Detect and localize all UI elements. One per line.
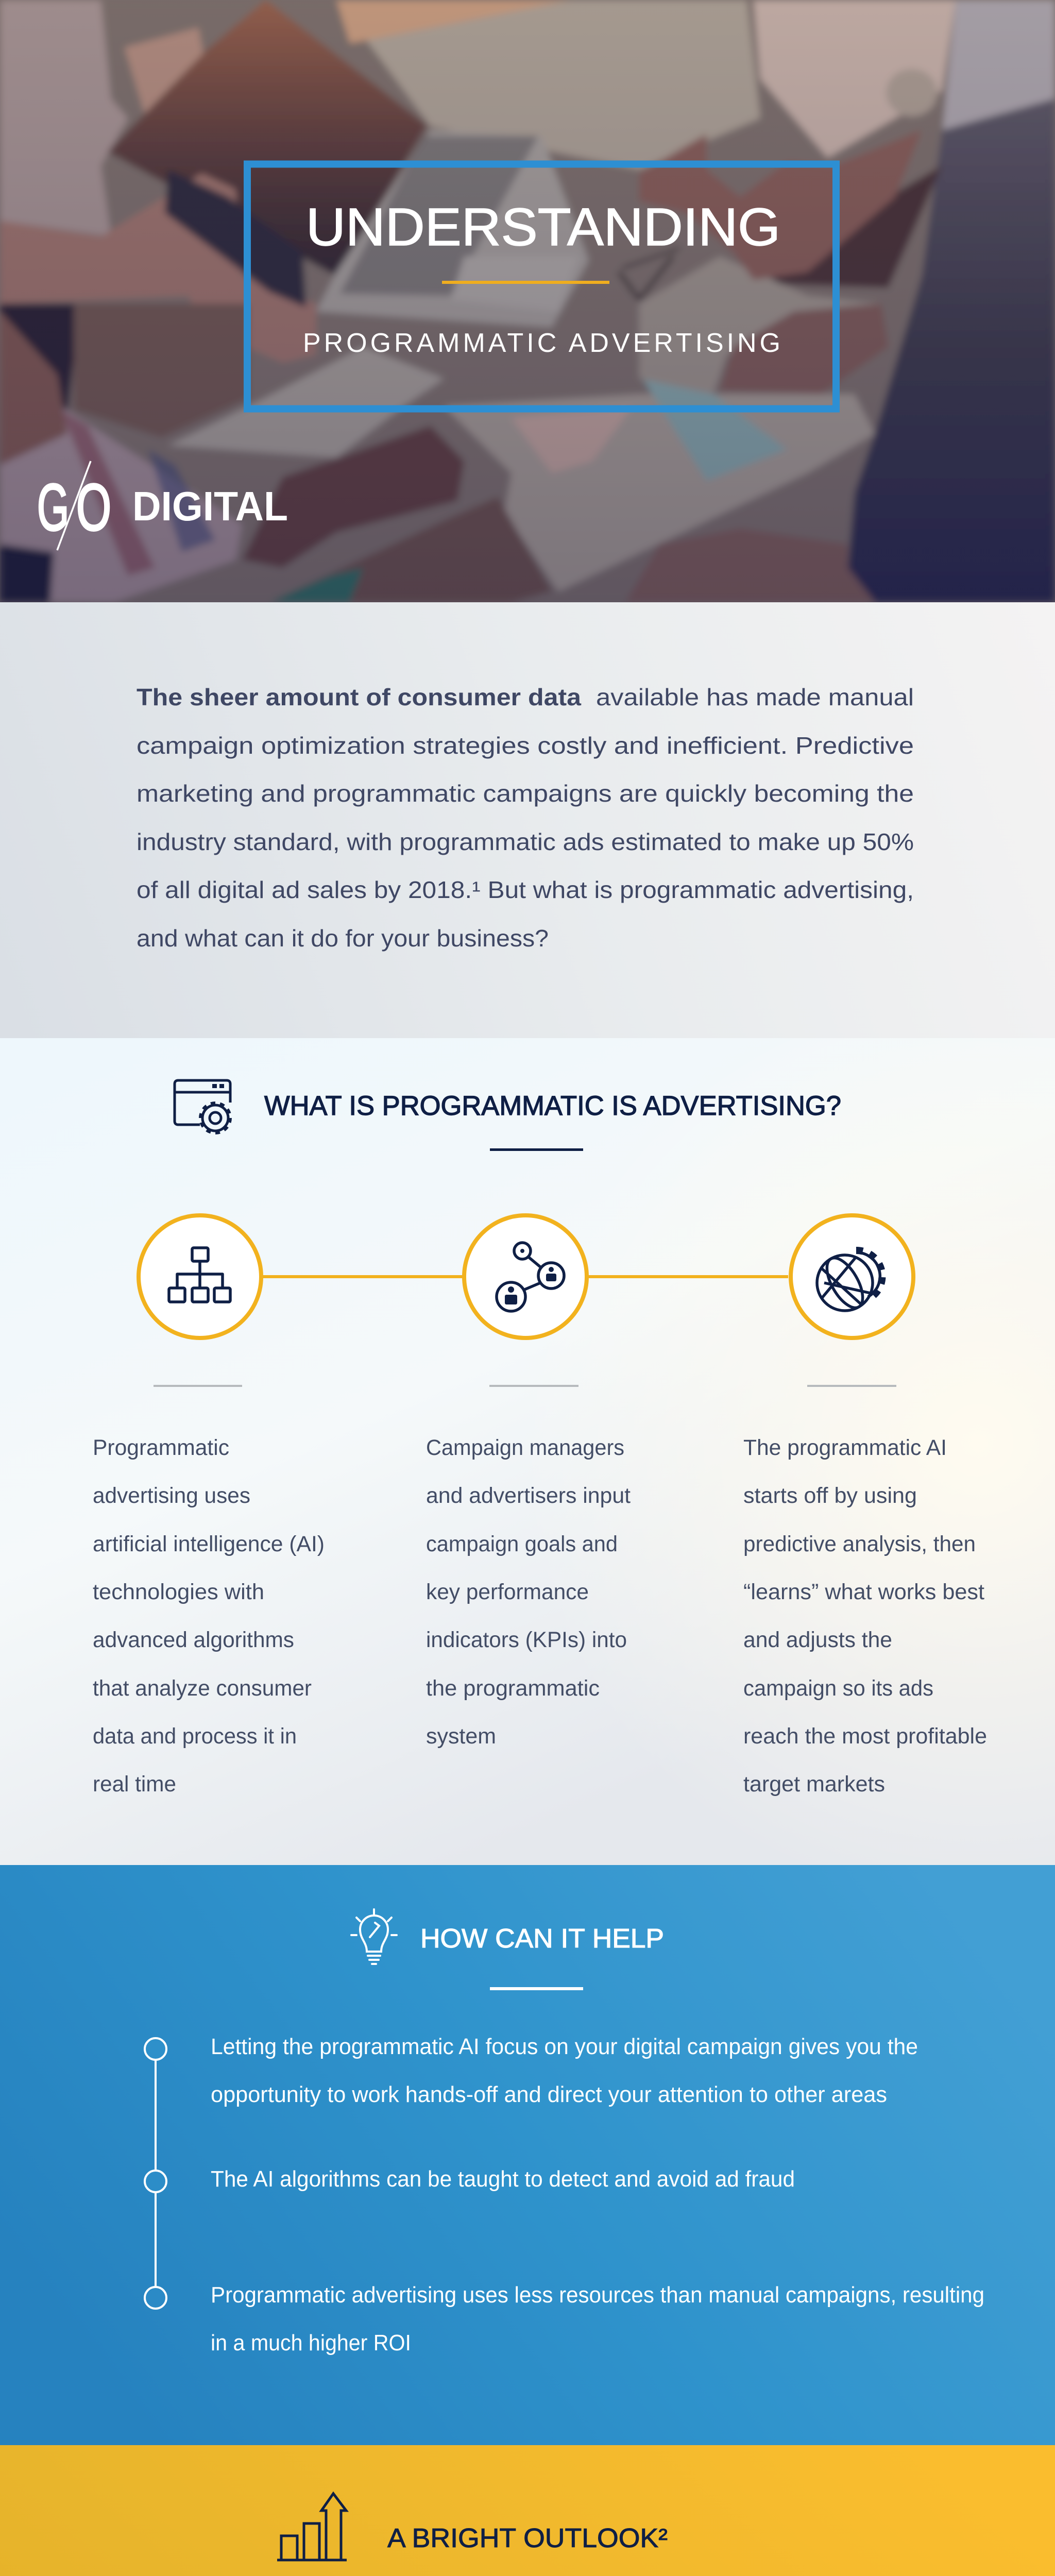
step 3 text bbox=[743, 1435, 987, 1797]
step 2 text: and advertisers input bbox=[426, 1483, 631, 1508]
intro paragraph: and what can it do for your business? bbox=[137, 925, 549, 952]
step 1 icon: org chart bbox=[139, 1215, 261, 1338]
panel: intro bbox=[0, 602, 1055, 1038]
step 1 text: advanced algorithms bbox=[93, 1628, 294, 1652]
timeline bbox=[145, 2038, 166, 2309]
step 1 text: technologies with bbox=[93, 1580, 264, 1604]
title: understanding: UNDERSTANDING bbox=[306, 197, 780, 257]
step 1 text: data and process it in bbox=[93, 1724, 297, 1749]
intro paragraph: of all digital ad sales by 2018.¹ But what is programmatic advertising, bbox=[137, 876, 914, 903]
step 3 text: campaign so its ads bbox=[743, 1676, 933, 1701]
hero photo: team at laptop bbox=[0, 0, 1055, 602]
heading underline bbox=[490, 1148, 583, 1151]
step 3 text: The programmatic AI bbox=[743, 1435, 947, 1460]
step 3 text: and adjusts the bbox=[743, 1628, 892, 1652]
heading: what is programmatic: WHAT IS PROGRAMMATIC IS ADVERTISING? bbox=[264, 1091, 841, 1121]
intro paragraph: The sheer amount of consumer data bbox=[137, 684, 581, 710]
step 1 text: real time bbox=[93, 1772, 176, 1797]
heading underline bbox=[490, 1987, 583, 1990]
benefit 1: opportunity to work hands-off and direct your attention to other areas bbox=[211, 2082, 887, 2107]
logo: GO Digital: G bbox=[37, 471, 69, 545]
panel: what is programmatic bbox=[0, 1038, 1055, 1865]
intro paragraph bbox=[137, 684, 914, 952]
benefit 1 bbox=[211, 2034, 918, 2107]
heading: how can it help: HOW CAN IT HELP bbox=[420, 1924, 664, 1954]
benefit 3: Programmatic advertising uses less resources than manual campaigns, resulting bbox=[211, 2282, 984, 2308]
step 1 text bbox=[93, 1435, 325, 1797]
benefit 3: in a much higher ROI bbox=[211, 2330, 411, 2355]
photo tint bbox=[0, 0, 1055, 602]
step 2 text: key performance bbox=[426, 1580, 589, 1604]
step 3 icon: globe with gear bbox=[791, 1215, 913, 1338]
logo: GO Digital bbox=[37, 461, 288, 550]
step 1 text: advertising uses bbox=[93, 1483, 250, 1508]
step 2 text: campaign goals and bbox=[426, 1532, 618, 1556]
icon: growth bars bbox=[277, 2494, 347, 2560]
gold title divider bbox=[442, 281, 609, 284]
panel: a bright outlook bbox=[0, 2445, 1055, 2576]
logo: GO Digital: DIGITAL bbox=[132, 483, 288, 529]
step 2 icon: network of people bbox=[464, 1215, 587, 1338]
panel: hero bbox=[0, 0, 1055, 602]
heading: a bright outlook: A BRIGHT OUTLOOK² bbox=[387, 2523, 668, 2553]
step 1 text: Programmatic bbox=[93, 1435, 229, 1460]
benefit 3 bbox=[211, 2282, 984, 2355]
step 2 text: Campaign managers bbox=[426, 1435, 624, 1460]
step 1 text: that analyze consumer bbox=[93, 1676, 312, 1701]
benefit 2: The AI algorithms can be taught to detect and avoid ad fraud bbox=[211, 2166, 795, 2192]
subtitle: PROGRAMMATIC ADVERTISING bbox=[303, 328, 780, 358]
step 3 text: target markets bbox=[743, 1772, 885, 1797]
step 3 text: “learns” what works best bbox=[743, 1580, 984, 1604]
icon: browser window with gear bbox=[175, 1080, 230, 1133]
logo: GO Digital: O bbox=[76, 471, 111, 545]
step 3 text: starts off by using bbox=[743, 1483, 917, 1508]
step 2 text: indicators (KPIs) into bbox=[426, 1628, 627, 1652]
title frame bbox=[247, 164, 836, 409]
connector line bbox=[263, 1275, 788, 1278]
intro paragraph: campaign optimization strategies costly and inefficient. Predictive bbox=[137, 732, 914, 759]
step 3 text: reach the most profitable bbox=[743, 1724, 987, 1749]
step 2 text: system bbox=[426, 1724, 496, 1749]
step 3 text: predictive analysis, then bbox=[743, 1532, 976, 1556]
step 2 text: the programmatic bbox=[426, 1676, 600, 1701]
intro paragraph: marketing and programmatic campaigns are quickly becoming the bbox=[137, 780, 914, 807]
intro paragraph: industry standard, with programmatic ads estimated to make up 50% bbox=[137, 828, 914, 855]
step 2 text bbox=[426, 1435, 631, 1749]
step 1 text: artificial intelligence (AI) bbox=[93, 1532, 325, 1556]
benefit 1: Letting the programmatic AI focus on your digital campaign gives you the bbox=[211, 2034, 918, 2059]
step dividers bbox=[154, 1385, 896, 1387]
icon: light bulb bbox=[351, 1909, 397, 1964]
panel: how can it help bbox=[0, 1865, 1055, 2445]
intro paragraph: available has made manual bbox=[596, 684, 914, 710]
